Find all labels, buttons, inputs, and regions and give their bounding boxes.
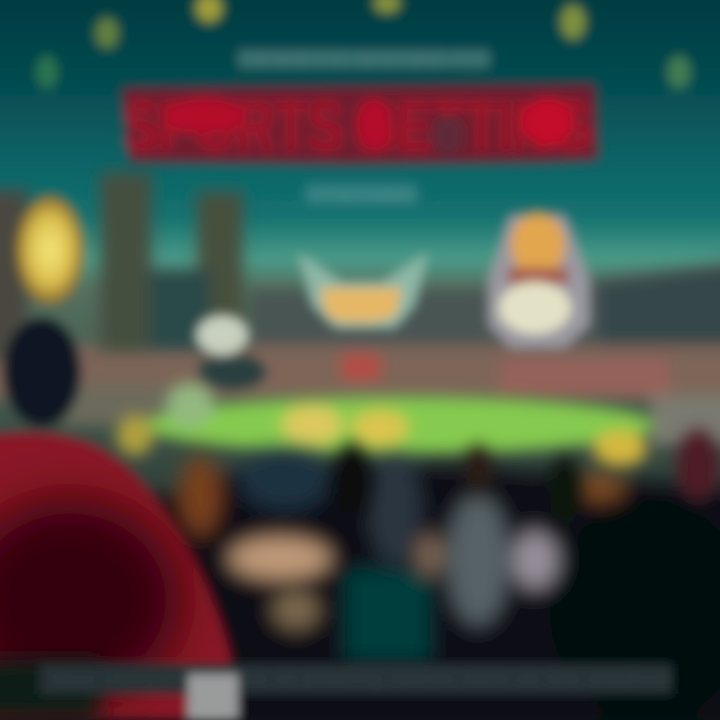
left badge xyxy=(196,315,266,390)
yellow floodlight xyxy=(16,196,84,304)
stadium stands far xyxy=(0,258,720,445)
title: SPORTS BETTING xyxy=(123,87,593,165)
right shield badge xyxy=(488,213,590,348)
person body xyxy=(0,433,232,720)
crowd dark mass xyxy=(150,450,720,720)
body shadow xyxy=(0,500,180,700)
foreground person in red xyxy=(0,318,232,720)
subtitle below title: AT THE STADIUM xyxy=(310,187,414,204)
center winged badge xyxy=(298,252,428,328)
seat back xyxy=(0,660,100,720)
crowd heads xyxy=(334,429,720,526)
pitch xyxy=(117,383,655,466)
bottom caption xyxy=(40,664,672,720)
towers xyxy=(0,172,243,360)
stars xyxy=(36,0,691,89)
subtitle top: SPORTS GUIDE TO xyxy=(239,50,489,71)
person head xyxy=(4,318,80,426)
bottom caption: Your complete guide to placing sports bets at the stadium xyxy=(50,669,670,688)
